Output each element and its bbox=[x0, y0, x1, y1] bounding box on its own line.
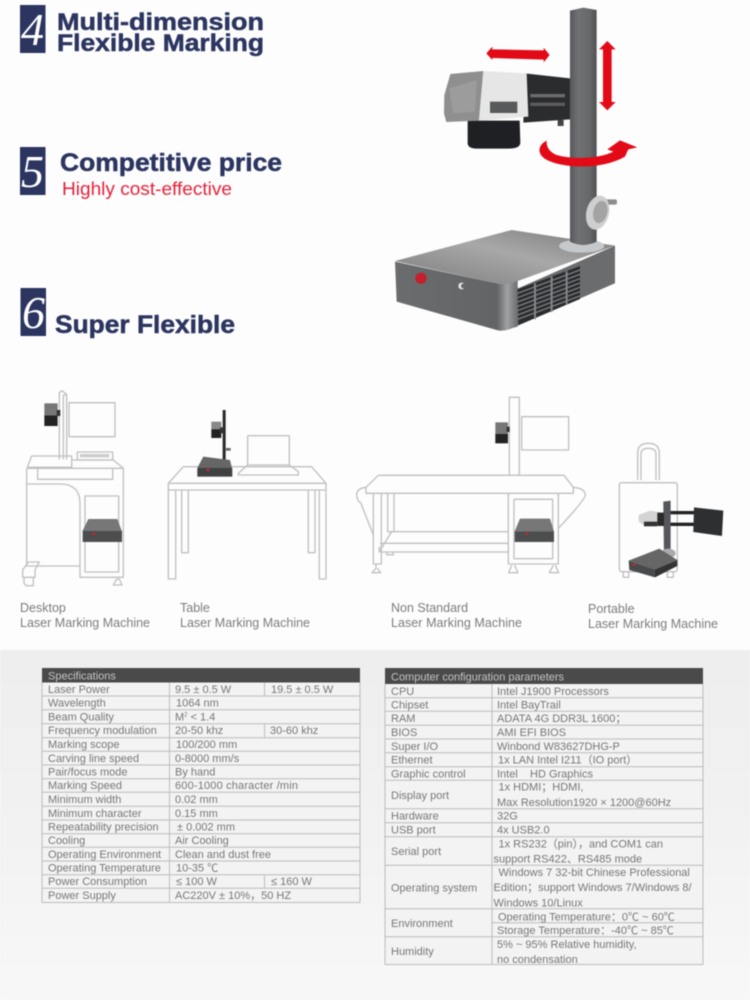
specification rows: 2 bbox=[184, 712, 188, 718]
heading: Multi-dimension Flexible Marking: Flexible Marking bbox=[57, 30, 264, 57]
table header: Computer configuration parameters bbox=[391, 672, 565, 684]
specification rows: 10-35 ℃ bbox=[176, 862, 218, 874]
specification rows: Power Supply bbox=[48, 890, 116, 902]
caption: Table: Laser Marking Machine bbox=[180, 616, 310, 630]
machine base bbox=[395, 230, 615, 331]
emergency stop button bbox=[415, 273, 427, 284]
configuration rows: Edition；support Windows 7/Windows 8/ bbox=[494, 882, 693, 894]
table: computer configuration parameters bbox=[385, 668, 703, 966]
specification rows bbox=[48, 684, 334, 902]
foot pedal bbox=[23, 562, 122, 586]
caption: Desktop bbox=[20, 601, 150, 630]
configuration rows: no condensation bbox=[497, 954, 578, 966]
specification rows: Repeatability precision bbox=[48, 822, 159, 834]
scenario: portable machine illustration bbox=[619, 443, 723, 577]
configuration rows: Intel HD Graphics bbox=[497, 768, 593, 780]
configuration rows: Winbond W83627DHG-P bbox=[497, 741, 620, 753]
height adjustment knob bbox=[582, 193, 617, 232]
configuration rows: 5% ~ 95% Relative humidity, bbox=[497, 939, 637, 951]
laser head bbox=[444, 71, 528, 149]
subheading: Highly cost-effective: Highly cost-effective bbox=[62, 178, 232, 199]
portable machine arm and monitor bbox=[668, 507, 723, 536]
specification rows: M bbox=[175, 712, 184, 724]
caption: Portable: Portable bbox=[588, 602, 635, 616]
specification rows: Wavelength bbox=[48, 698, 106, 710]
table grid bbox=[385, 684, 703, 964]
configuration rows: Windows 10/Linux bbox=[494, 898, 583, 910]
configuration rows: RAM bbox=[391, 713, 415, 725]
configuration rows: Serial port bbox=[391, 846, 441, 858]
caption: Portable bbox=[588, 602, 718, 631]
feature 6: super flexible bbox=[20, 287, 235, 339]
caption: Non Standard: Non Standard bbox=[391, 601, 468, 615]
configuration rows: Operating Temperature：0℃ ~ 60℃ bbox=[498, 912, 675, 924]
configuration rows: CPU bbox=[391, 686, 414, 698]
specification rows: 0.02 mm bbox=[175, 794, 218, 806]
configuration rows bbox=[391, 686, 693, 966]
configuration rows: 32G bbox=[497, 810, 518, 822]
laptop bbox=[238, 436, 298, 475]
specification rows: Minimum width bbox=[48, 794, 121, 806]
specification rows: 600-1000 character /min bbox=[175, 780, 298, 792]
specification rows: Carving line speed bbox=[48, 753, 139, 765]
mini marking machine bbox=[197, 410, 232, 477]
configuration rows: Hardware bbox=[391, 810, 439, 822]
specification rows: AC220V ± 10%，50 HZ bbox=[175, 890, 291, 902]
conveyor frame bbox=[357, 475, 585, 564]
pole bbox=[59, 391, 67, 459]
portable machine base bbox=[629, 549, 677, 577]
number badge 4: 4 bbox=[21, 4, 44, 55]
configuration rows: BIOS bbox=[391, 727, 417, 739]
vertical column bbox=[570, 8, 597, 245]
scenario: table machine illustration bbox=[168, 410, 326, 579]
specification rows: ± 0.002 mm bbox=[177, 822, 235, 834]
feature 5: competitive price bbox=[20, 146, 282, 197]
caption: Non Standard: Laser Marking Machine bbox=[391, 616, 522, 630]
specification rows: 30-60 khz bbox=[270, 725, 318, 737]
specification rows: By hand bbox=[175, 766, 215, 778]
configuration rows: Chipset bbox=[391, 700, 428, 712]
heading: Multi-dimension Flexible Marking: Multi-dimension bbox=[57, 9, 264, 36]
product photo: laser marking machine with motion arrows bbox=[395, 8, 637, 331]
marking head bbox=[495, 422, 510, 443]
scenario: non standard machine illustration bbox=[357, 397, 585, 573]
configuration rows: Humidity bbox=[391, 946, 434, 958]
portable machine column and head bbox=[639, 501, 676, 558]
suitcase bbox=[619, 443, 677, 577]
specification rows: Cooling bbox=[48, 835, 85, 847]
arrow: vertical motion bbox=[599, 41, 616, 110]
caption: Desktop: Laser Marking Machine bbox=[20, 616, 150, 630]
configuration rows: Ethernet bbox=[391, 754, 433, 766]
configuration rows: AMI EFI BIOS bbox=[497, 727, 566, 739]
specification rows: 0-8000 mm/s bbox=[175, 753, 240, 765]
control box bbox=[515, 519, 554, 542]
configuration rows: ADATA 4G DDR3L 1600； bbox=[497, 713, 626, 725]
specification rows: 9.5 ± 0.5 W bbox=[175, 684, 232, 696]
table header bbox=[385, 668, 703, 684]
heading: Super Flexible: Super Flexible bbox=[55, 311, 235, 339]
configuration rows: 1x HDMI；HDMI, bbox=[498, 782, 583, 794]
table header: Specifications bbox=[48, 670, 116, 682]
configuration rows: Intel J1900 Processors bbox=[497, 686, 609, 698]
caption: Table bbox=[180, 601, 310, 630]
specification rows: Minimum character bbox=[48, 808, 142, 820]
configuration rows: 1x RS232（pin），and COM1 can bbox=[498, 838, 663, 850]
specification rows: Clean and dust free bbox=[175, 849, 271, 861]
configuration rows: Operating system bbox=[391, 882, 477, 894]
table: specifications bbox=[42, 668, 360, 902]
configuration rows: Display port bbox=[391, 790, 449, 802]
specification rows: Pair/focus mode bbox=[48, 766, 127, 778]
configuration rows: Windows 7 32-bit Chinese Professional bbox=[498, 867, 690, 879]
caption: Table: Table bbox=[180, 601, 210, 615]
table header bbox=[42, 668, 360, 682]
configuration rows: Intel BayTrail bbox=[497, 700, 561, 712]
specification rows: 100/200 mm bbox=[176, 739, 237, 751]
configuration rows: USB port bbox=[391, 824, 436, 836]
specification rows: Marking Speed bbox=[48, 780, 122, 792]
scenario: desktop machine illustration bbox=[23, 391, 123, 586]
arrow: rotation bbox=[539, 140, 637, 167]
keyboard bbox=[77, 452, 113, 460]
specification rows: < 1.4 bbox=[188, 712, 215, 724]
control box bbox=[83, 519, 122, 542]
configuration rows: Graphic control bbox=[391, 768, 466, 780]
specification rows: Air Cooling bbox=[175, 835, 229, 847]
specification rows: Beam Quality bbox=[48, 712, 115, 724]
specification rows: Laser Power bbox=[48, 684, 110, 696]
monitor bbox=[69, 403, 115, 437]
number badge 5: 5 bbox=[21, 146, 44, 197]
specification rows: Frequency modulation bbox=[48, 725, 157, 737]
configuration rows: 4x USB2.0 bbox=[497, 824, 550, 836]
feet bbox=[372, 552, 559, 573]
configuration rows: Storage Temperature：-40℃ ~ 85℃ bbox=[497, 925, 674, 937]
configuration rows: 1x LAN Intel I211（IO port） bbox=[498, 754, 637, 766]
table body bbox=[385, 684, 703, 965]
configuration rows: Environment bbox=[391, 918, 453, 930]
configuration rows: support RS422、RS485 mode bbox=[494, 854, 642, 866]
specification rows: 1064 nm bbox=[176, 698, 219, 710]
horizontal arm bbox=[523, 73, 570, 126]
table bbox=[168, 467, 326, 579]
marking head bbox=[44, 403, 60, 426]
specification rows: ≤ 160 W bbox=[271, 876, 313, 888]
caption: Portable: Laser Marking Machine bbox=[588, 617, 718, 631]
cabinet outline bbox=[27, 456, 123, 577]
specification rows: 19.5 ± 0.5 W bbox=[271, 684, 334, 696]
heading: Competitive price: Competitive price bbox=[60, 149, 282, 177]
caption: Non Standard bbox=[391, 601, 522, 630]
column mount plate bbox=[559, 239, 604, 253]
specification rows: Operating Temperature bbox=[48, 862, 161, 874]
arrow: horizontal motion bbox=[486, 47, 550, 62]
feature 4: multi-dimension flexible marking bbox=[20, 4, 264, 57]
background panel: specifications area bbox=[0, 650, 750, 1000]
specification rows: Marking scope bbox=[48, 739, 120, 751]
specification rows: Power Consumption bbox=[48, 876, 147, 888]
number badge 6: 6 bbox=[22, 287, 45, 338]
pole and monitor bbox=[509, 397, 569, 475]
specification rows: ≤ 100 W bbox=[176, 876, 218, 888]
caption: Desktop: Desktop bbox=[20, 601, 66, 615]
specification rows: 20-50 khz bbox=[175, 725, 223, 737]
configuration rows: Max Resolution1920 × 1200@60Hz bbox=[497, 797, 671, 809]
specification rows: Operating Environment bbox=[48, 849, 161, 861]
heading: Multi-dimension Flexible Marking bbox=[57, 9, 264, 57]
table grid bbox=[42, 682, 360, 902]
configuration rows: Super I/O bbox=[391, 741, 439, 753]
table body bbox=[42, 682, 360, 902]
specification rows: 0.15 mm bbox=[175, 808, 218, 820]
